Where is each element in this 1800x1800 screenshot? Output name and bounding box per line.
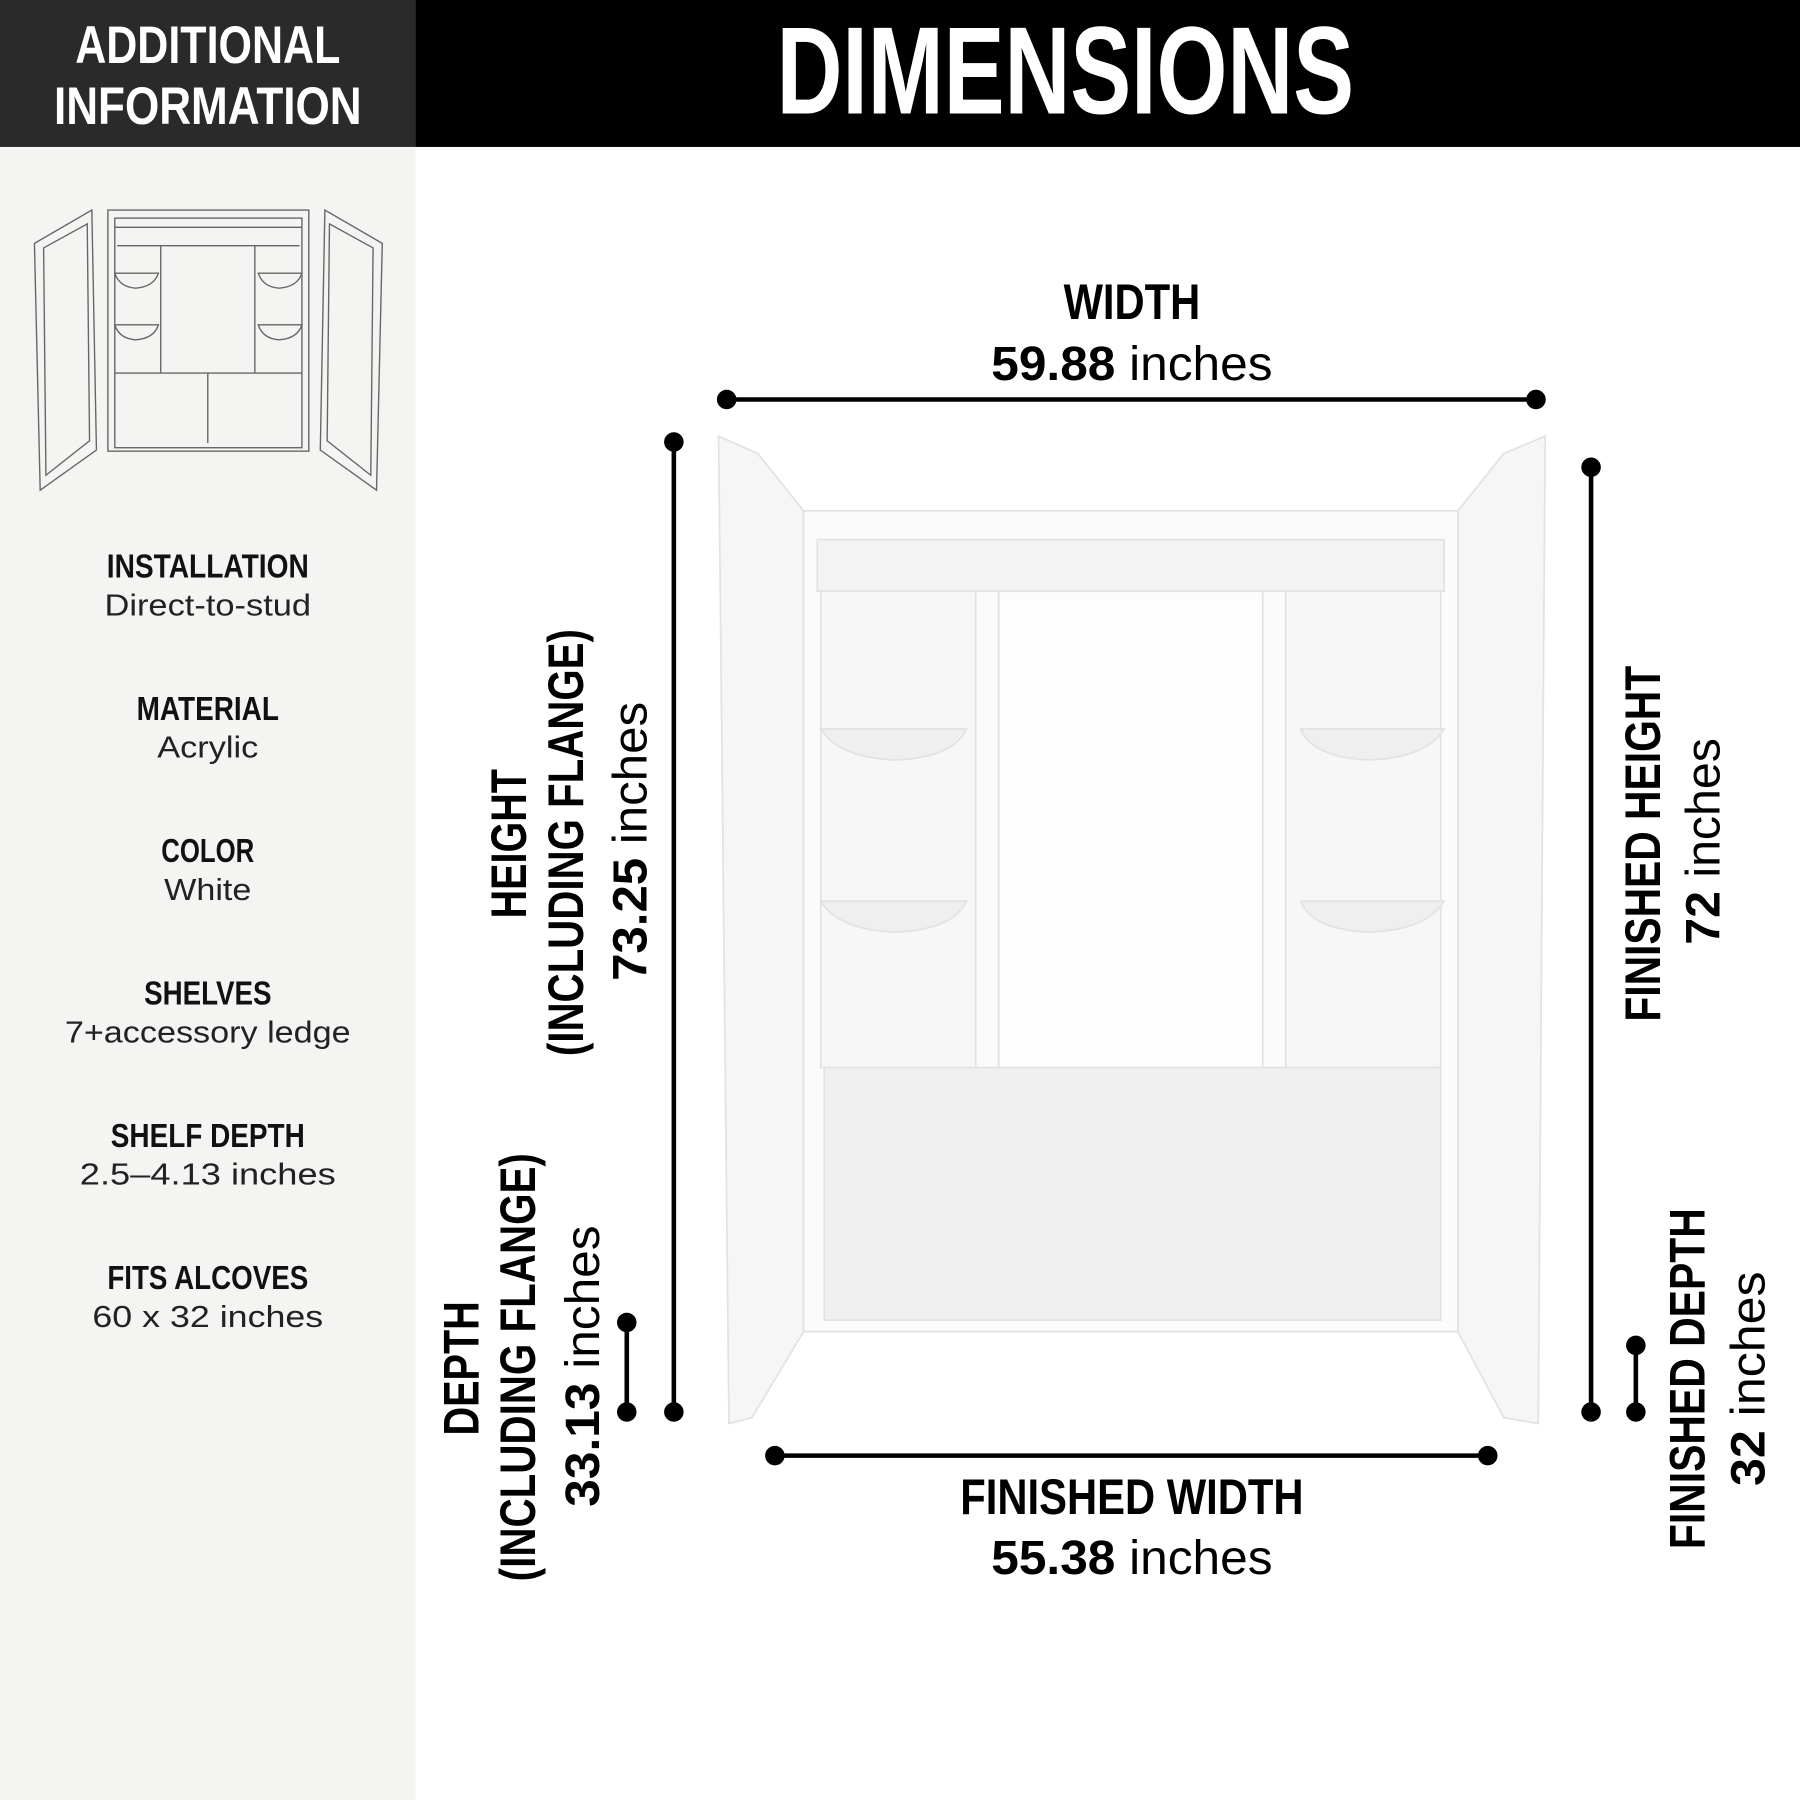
label: height including flange: 73.25 inches xyxy=(603,702,657,981)
info: installation: INSTALLATION xyxy=(107,548,309,585)
info: material: Acrylic xyxy=(157,730,258,765)
label: height including flange xyxy=(480,629,657,1056)
info: installation: Direct-to-stud xyxy=(104,587,311,622)
header: additional information: ADDITIONAL xyxy=(75,16,340,75)
label: finished width xyxy=(960,1468,1304,1585)
label: finished width: 55.38 inches xyxy=(991,1531,1273,1585)
product image: shower wall xyxy=(719,436,1545,1423)
label: finished depth: FINISHED DEPTH xyxy=(1659,1208,1716,1549)
label: width xyxy=(991,273,1273,391)
label: depth including flange: 33.13 inches xyxy=(556,1225,610,1507)
label: depth including flange: DEPTH xyxy=(433,1301,490,1436)
left panel background xyxy=(0,147,416,1800)
info: fits alcoves: 60 x 32 inches xyxy=(92,1299,323,1334)
label: finished height: FINISHED HEIGHT xyxy=(1614,666,1671,1022)
header: dimensions title xyxy=(416,0,1800,147)
dimension: height line xyxy=(665,433,683,1421)
dimension: finished depth line xyxy=(1627,1336,1645,1421)
label: width: WIDTH xyxy=(1064,273,1200,330)
dimension: finished width line xyxy=(766,1446,1497,1465)
label: finished depth xyxy=(1659,1208,1775,1549)
info: color xyxy=(161,833,254,907)
label: depth including flange: (INCLUDING FLANGE) xyxy=(489,1153,546,1581)
dimension: depth line xyxy=(618,1313,636,1421)
info: shelf depth xyxy=(80,1118,336,1192)
thumbnail: shower kit line drawing xyxy=(34,210,382,490)
header: additional information xyxy=(0,0,416,147)
info: shelf depth: 2.5–4.13 inches xyxy=(80,1157,336,1192)
label: finished height xyxy=(1614,666,1731,1022)
label: finished depth: 32 inches xyxy=(1721,1271,1775,1486)
info: material: MATERIAL xyxy=(137,691,279,728)
label: depth including flange xyxy=(433,1153,610,1581)
info: shelves: 7+accessory ledge xyxy=(65,1014,351,1049)
label: finished width: FINISHED WIDTH xyxy=(960,1468,1304,1525)
info: color: White xyxy=(164,872,251,907)
info: installation xyxy=(104,548,311,622)
info: shelves: SHELVES xyxy=(144,975,271,1012)
label: height including flange: (INCLUDING FLANGE) xyxy=(537,629,594,1056)
label: finished height: 72 inches xyxy=(1677,738,1731,945)
info: shelf depth: SHELF DEPTH xyxy=(111,1118,305,1155)
dimension: finished height line xyxy=(1582,458,1600,1421)
info: color: COLOR xyxy=(161,833,254,870)
label: height including flange: HEIGHT xyxy=(480,769,537,918)
info: fits alcoves xyxy=(92,1260,323,1334)
label: width: 59.88 inches xyxy=(991,337,1273,391)
info: fits alcoves: FITS ALCOVES xyxy=(107,1260,308,1297)
dimension: width line xyxy=(717,390,1545,409)
info: material xyxy=(137,691,279,765)
info: shelves xyxy=(65,975,351,1049)
header: dimensions title: DIMENSIONS xyxy=(777,3,1354,141)
header: additional information: INFORMATION xyxy=(54,77,362,136)
